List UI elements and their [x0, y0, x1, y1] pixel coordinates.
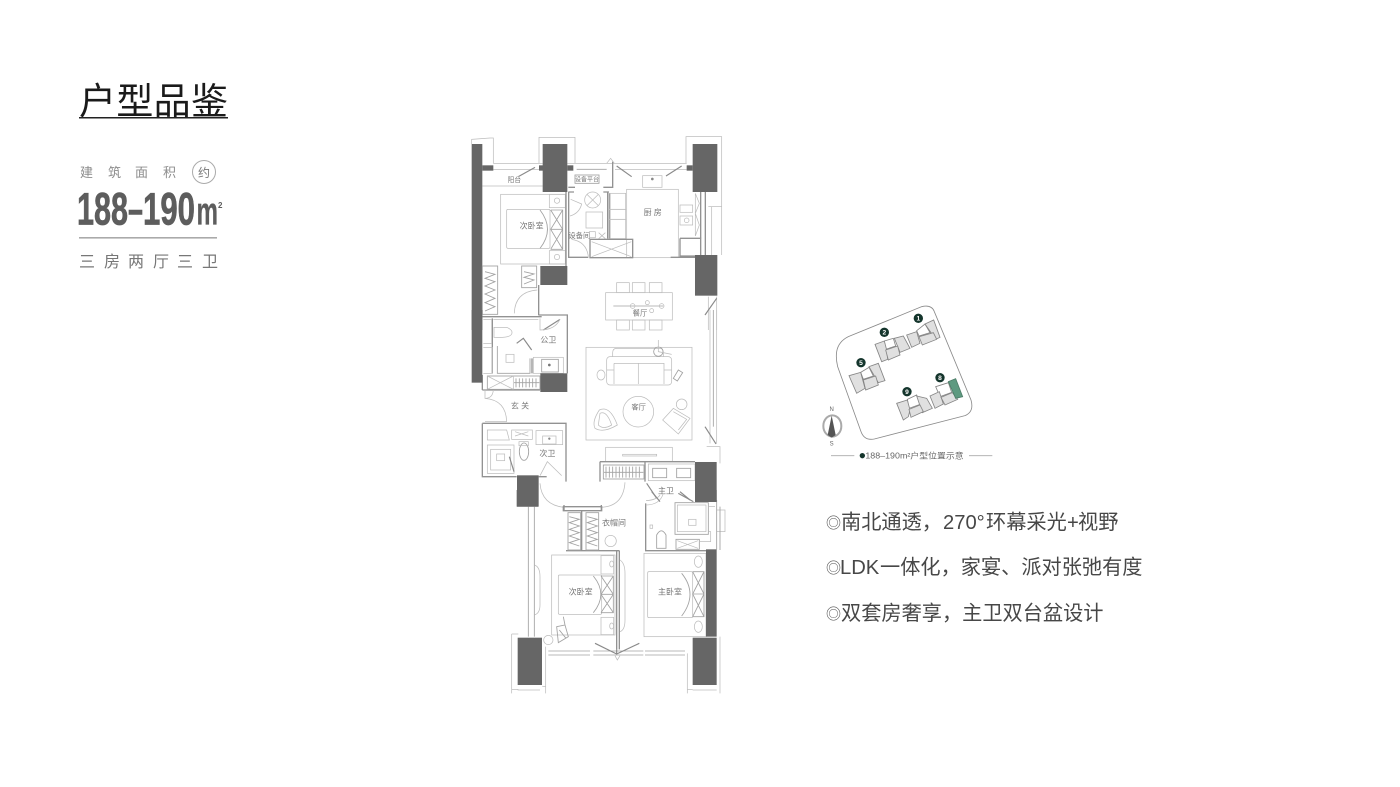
divider under area [79, 237, 217, 239]
compass: S [830, 441, 834, 447]
floor plan: south section: 衣帽间 [602, 517, 626, 527]
floor plan: north section: 次卧室 [520, 221, 544, 231]
area figure: – [128, 184, 143, 234]
building 9 [897, 395, 932, 420]
selling point 1: 270° [943, 512, 985, 534]
building 8 [930, 379, 963, 408]
selling point 1: 环幕采光 [986, 511, 1067, 534]
compass [823, 407, 841, 447]
site plan caption: 188–190m²户型位置示意 [865, 450, 964, 460]
floor plan: north section: 厨 房 [644, 207, 662, 217]
site plan caption [831, 450, 992, 460]
site buildings [849, 314, 963, 420]
area figure: 188 [77, 184, 128, 234]
floor plan: middle section: 次卫 [539, 448, 555, 458]
selling point 2: ◎ [826, 560, 841, 577]
compass: N [830, 407, 834, 413]
selling point 3: 双套房奢享，主卫双台盆设计 [841, 602, 1103, 625]
selling point 1: 视野 [1078, 511, 1118, 534]
building 5 [849, 363, 885, 393]
floor plan: middle section: 玄 关 [511, 400, 529, 410]
selling point 1 [826, 511, 1118, 534]
selling point 1: ◎ [826, 515, 841, 532]
floor plan: north section: 设备平台 [575, 176, 599, 184]
floor plan: north section: 阳台 [508, 175, 521, 184]
area label [80, 160, 216, 184]
site boundary [836, 306, 972, 439]
selling point 3: ◎ [826, 606, 841, 623]
area figure [77, 184, 223, 234]
building 1 [907, 320, 940, 347]
building numbers: 1 [916, 316, 920, 323]
floor plan: south section: 次卧室 [569, 586, 593, 596]
selling point 2: 一体化，家宴、派对张弛有度 [880, 556, 1142, 579]
area label: 约 [198, 165, 210, 180]
area label: 建筑面积 [80, 165, 176, 180]
selling point 2: LDK [840, 557, 879, 579]
building numbers: 5 [859, 360, 863, 367]
floor plan: middle section [472, 310, 720, 510]
highlighted unit [948, 379, 963, 398]
area figure: 2 [218, 201, 223, 210]
area figure: 190 [143, 184, 195, 234]
building numbers: 8 [938, 375, 942, 382]
area figure: m [196, 190, 218, 234]
building numbers: 9 [905, 389, 909, 396]
title: 户型品鉴 [79, 81, 228, 122]
selling point 1: 南北通透， [841, 512, 942, 534]
selling point 1: + [1067, 512, 1079, 534]
floor plan: middle section: 主卫 [658, 486, 674, 496]
floor plan: middle section: 客厅 [631, 403, 646, 412]
site plan [823, 306, 992, 460]
floor plan: south section [512, 490, 725, 693]
building numbers [856, 314, 945, 396]
floor plan: middle section: 公卫 [540, 336, 556, 345]
floor plan: south section: 主卧室 [658, 586, 682, 596]
building 2 [875, 336, 910, 362]
layout type: 三房两厅三卫 [79, 253, 218, 271]
building numbers: 2 [882, 330, 886, 337]
floor plan [472, 137, 725, 693]
floor plan: north section: 设备间 [568, 231, 590, 240]
floor plan: north section: 餐厅 [633, 308, 647, 317]
floor plan: north section [472, 137, 722, 330]
